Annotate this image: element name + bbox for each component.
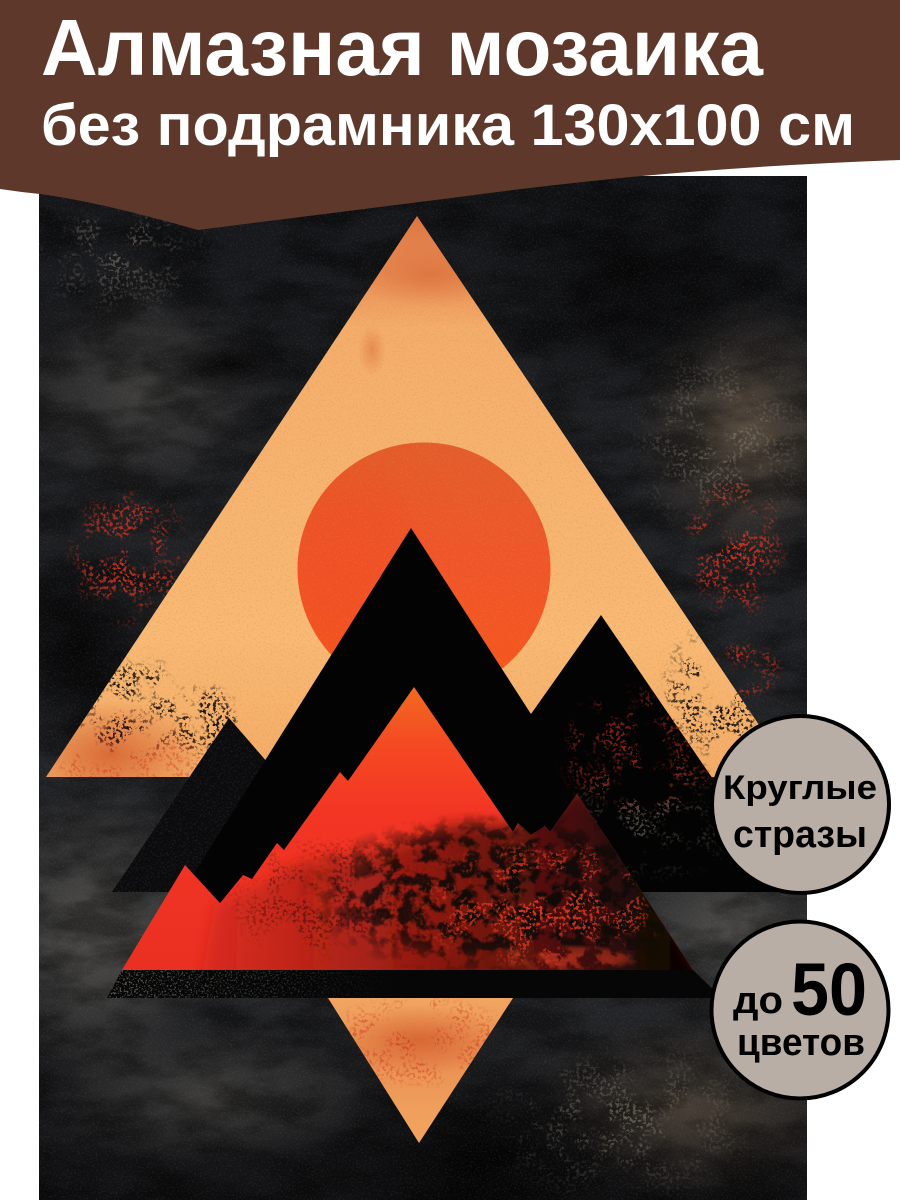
sun circle	[298, 442, 550, 669]
badge: up to 50 colors: до	[733, 980, 783, 1022]
badge: up to 50 colors	[712, 922, 888, 1098]
black horizontal bar	[107, 970, 722, 998]
large peach triangle	[46, 216, 759, 777]
poster artwork	[39, 176, 807, 1200]
title line 2: без подрамника 130х100 см	[41, 93, 855, 158]
badge: round rhinestones: Круглые	[723, 769, 877, 807]
title banner	[0, 0, 900, 230]
front black mountains	[194, 528, 777, 903]
textured dark background	[39, 176, 807, 1200]
rear left black mountain	[112, 718, 266, 892]
inverted peach triangle	[328, 998, 513, 1143]
badge: up to 50 colors: цветов	[737, 1022, 865, 1064]
badge: up to 50 colors: 50	[791, 948, 867, 1031]
badge: round rhinestones: стразы	[733, 814, 867, 856]
title line 1: Алмазная мозаика	[41, 3, 763, 92]
red mountain	[122, 687, 693, 970]
badge: round rhinestones	[712, 716, 889, 893]
